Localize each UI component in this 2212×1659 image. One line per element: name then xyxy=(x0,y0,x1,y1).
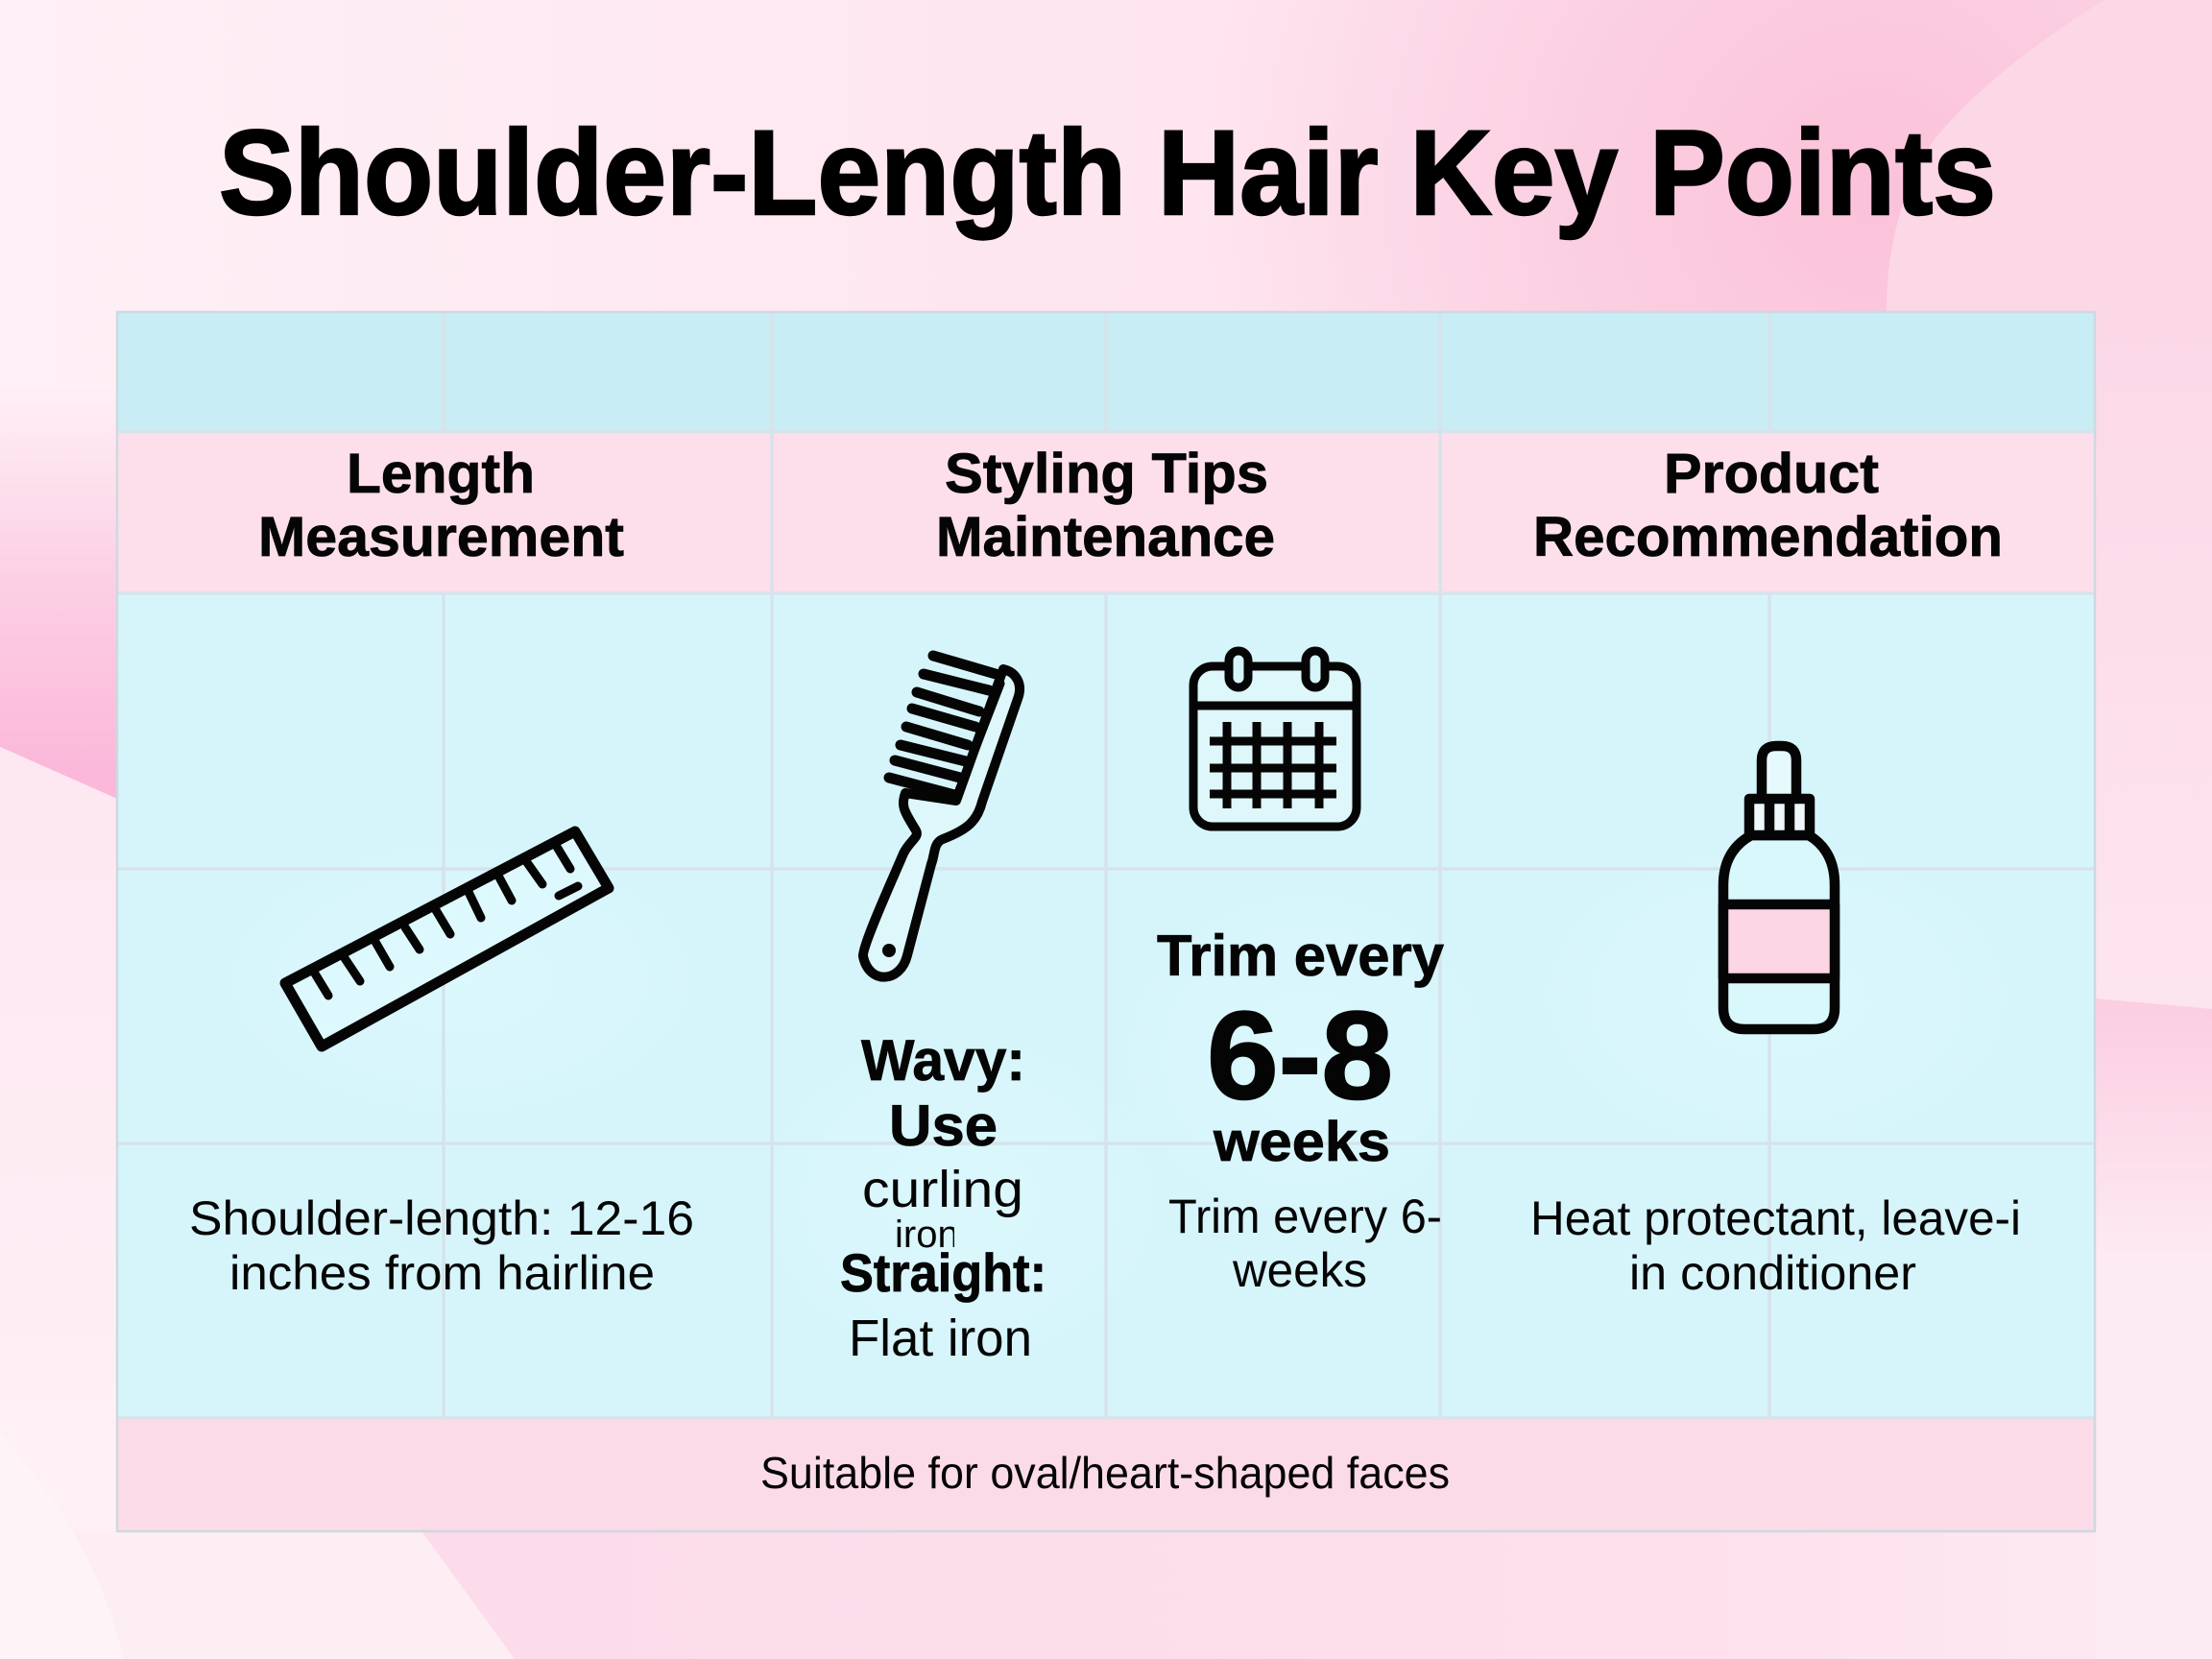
text: product recommendation xyxy=(1530,1191,2021,1300)
callout: trim every 6-8 weeks: weeks xyxy=(1213,1111,1390,1173)
callout: trim every 6-8 weeks xyxy=(1157,924,1445,1173)
icon: ruler xyxy=(285,831,609,1046)
text: maintenance: Trim every 6- xyxy=(1168,1190,1442,1243)
column heading: length measurement: Measurement xyxy=(258,506,624,568)
column heading: length measurement: Length xyxy=(347,443,535,505)
column heading: product recommendation: Product xyxy=(1664,443,1879,505)
content area xyxy=(117,593,2095,1418)
text: styling tips xyxy=(840,1028,1046,1367)
column heading: length measurement xyxy=(258,443,624,568)
column heading: styling tips maintenance: Maintenance xyxy=(936,506,1275,568)
text: maintenance xyxy=(1168,1190,1442,1297)
title: Shoulder-Length Hair Key Points xyxy=(219,107,1996,240)
callout: trim every 6-8 weeks: 6-8 xyxy=(1207,985,1393,1125)
text: styling tips: Straight: xyxy=(840,1242,1046,1303)
footer note: Suitable for oval/heart-shaped faces xyxy=(760,1448,1450,1498)
text: styling tips: iron xyxy=(895,1214,959,1256)
icon: serum bottle xyxy=(1723,746,1835,1029)
text: product recommendation: Heat protectant, leave-i xyxy=(1530,1191,2021,1245)
callout: trim every 6-8 weeks: Trim every xyxy=(1157,924,1445,988)
text: length measurement: Shoulder-length: 12-16 xyxy=(189,1191,694,1245)
header band xyxy=(117,431,2095,593)
column heading: product recommendation: Recommendation xyxy=(1533,506,2003,568)
text: length measurement xyxy=(189,1191,694,1300)
text: styling tips: Wavy: xyxy=(861,1028,1025,1093)
icon: comb xyxy=(863,656,1020,977)
text: styling tips: Flat iron xyxy=(849,1310,1032,1367)
icon: calendar xyxy=(1193,651,1357,827)
text: product recommendation: in conditioner xyxy=(1629,1246,1916,1300)
footer band xyxy=(117,1418,2095,1531)
top band xyxy=(117,312,2095,431)
column heading: product recommendation xyxy=(1533,443,2003,568)
table xyxy=(117,312,2095,1531)
column heading: styling tips maintenance: Styling Tips xyxy=(945,443,1268,505)
text: styling tips: curling xyxy=(862,1161,1023,1218)
text: styling tips: Use xyxy=(889,1094,998,1158)
text: maintenance: weeks xyxy=(1232,1243,1367,1297)
text: length measurement: inches from hairline xyxy=(229,1246,655,1300)
column heading: styling tips maintenance xyxy=(936,443,1275,568)
